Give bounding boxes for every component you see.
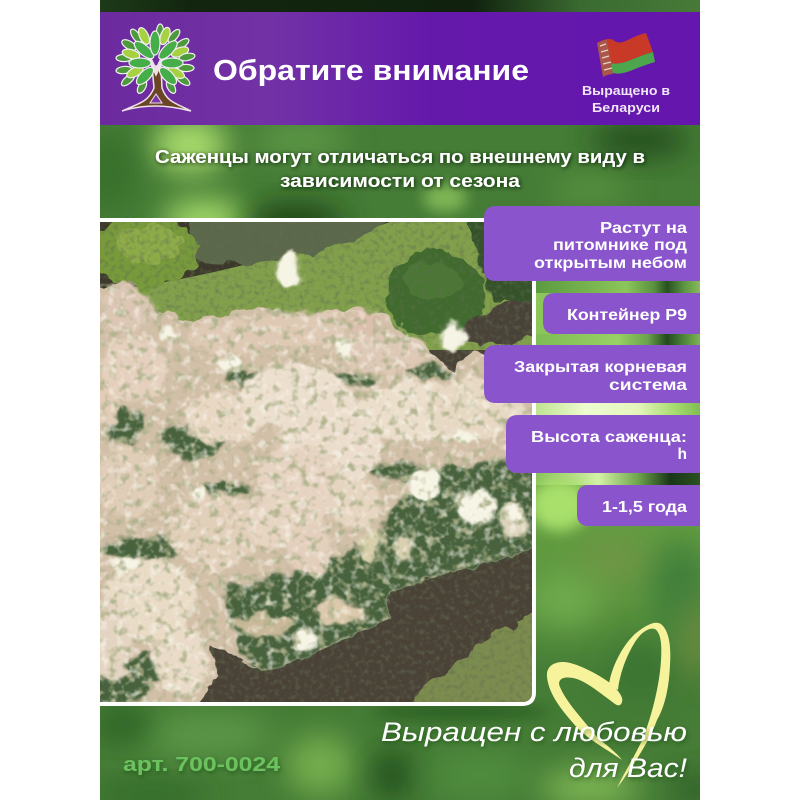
notice text xyxy=(155,146,645,191)
background plants xyxy=(90,215,540,345)
bush mass xyxy=(100,248,532,702)
pill: grown outdoors: Растут на xyxy=(600,220,687,237)
pill: age xyxy=(577,485,700,526)
pill: height: h xyxy=(678,446,687,463)
green bokeh background xyxy=(84,0,717,800)
flag caption: Выращено в xyxy=(582,83,670,98)
blossom mottling xyxy=(100,283,532,702)
feature pills xyxy=(484,206,700,526)
pill: container xyxy=(543,293,700,334)
pill: grown outdoors xyxy=(484,206,700,281)
flag caption xyxy=(582,83,670,115)
notice text: Саженцы могут отличаться по внешнему виду в xyxy=(155,146,645,167)
pill: container: Контейнер Р9 xyxy=(567,307,687,324)
pill: grown outdoors: открытым небом xyxy=(534,255,687,272)
slogan: Выращен с любовью xyxy=(381,717,687,747)
flower clusters xyxy=(91,286,527,692)
pill: root system: Закрытая корневая xyxy=(514,359,687,376)
article number: арт. 700-0024 xyxy=(123,754,281,776)
lawn xyxy=(100,222,532,350)
notice text: зависимости от сезона xyxy=(280,170,521,191)
white panicles xyxy=(111,257,524,648)
foliage shadows xyxy=(81,366,545,704)
photo frame xyxy=(100,218,536,706)
flag caption: Беларуси xyxy=(592,100,660,115)
pill: root system: система xyxy=(609,377,687,394)
title: Обратите внимание xyxy=(213,55,529,87)
overall texture xyxy=(100,222,532,702)
pill: height xyxy=(506,415,700,473)
slogan xyxy=(381,717,688,783)
pill: age: 1-1,5 года xyxy=(602,499,687,516)
icon: yellow heart xyxy=(547,623,670,788)
header band xyxy=(100,12,700,125)
lower grass xyxy=(414,612,532,702)
infographic canvas xyxy=(100,0,700,800)
icon: flag of Belarus xyxy=(597,33,655,77)
slogan: для Вас! xyxy=(569,753,688,783)
photo: hydrangea bushes xyxy=(100,222,532,702)
logo: tree xyxy=(116,24,196,111)
pill: height: Высота саженца: xyxy=(531,429,687,446)
pill: root system xyxy=(484,345,700,403)
pill: grown outdoors: питомнике под xyxy=(553,237,687,254)
